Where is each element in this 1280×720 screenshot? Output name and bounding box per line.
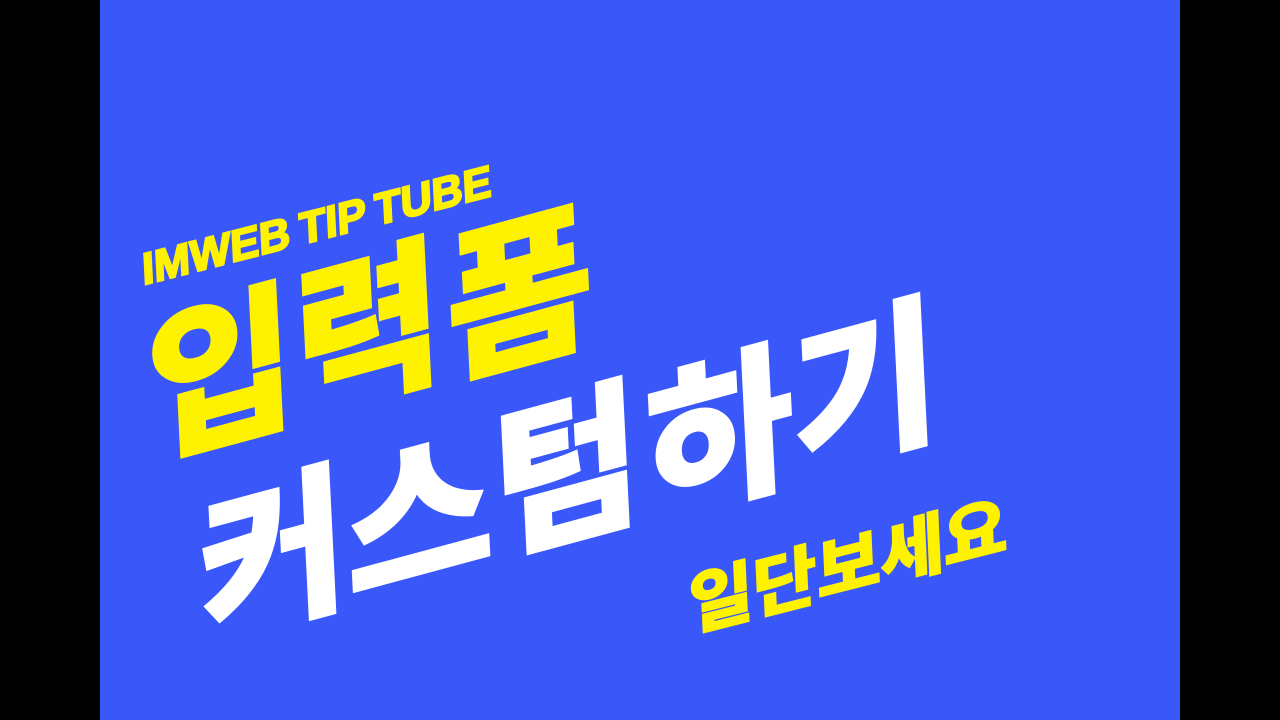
- heading: 입력폼: 입력폼: [143, 179, 598, 488]
- heading: 커스텀하기: 커스텀하기: [195, 278, 944, 670]
- label: IMWEB TIP TUBE: IMWEB TIP TUBE: [141, 156, 492, 295]
- callout: 일단보세요: 일단보세요: [687, 488, 1009, 645]
